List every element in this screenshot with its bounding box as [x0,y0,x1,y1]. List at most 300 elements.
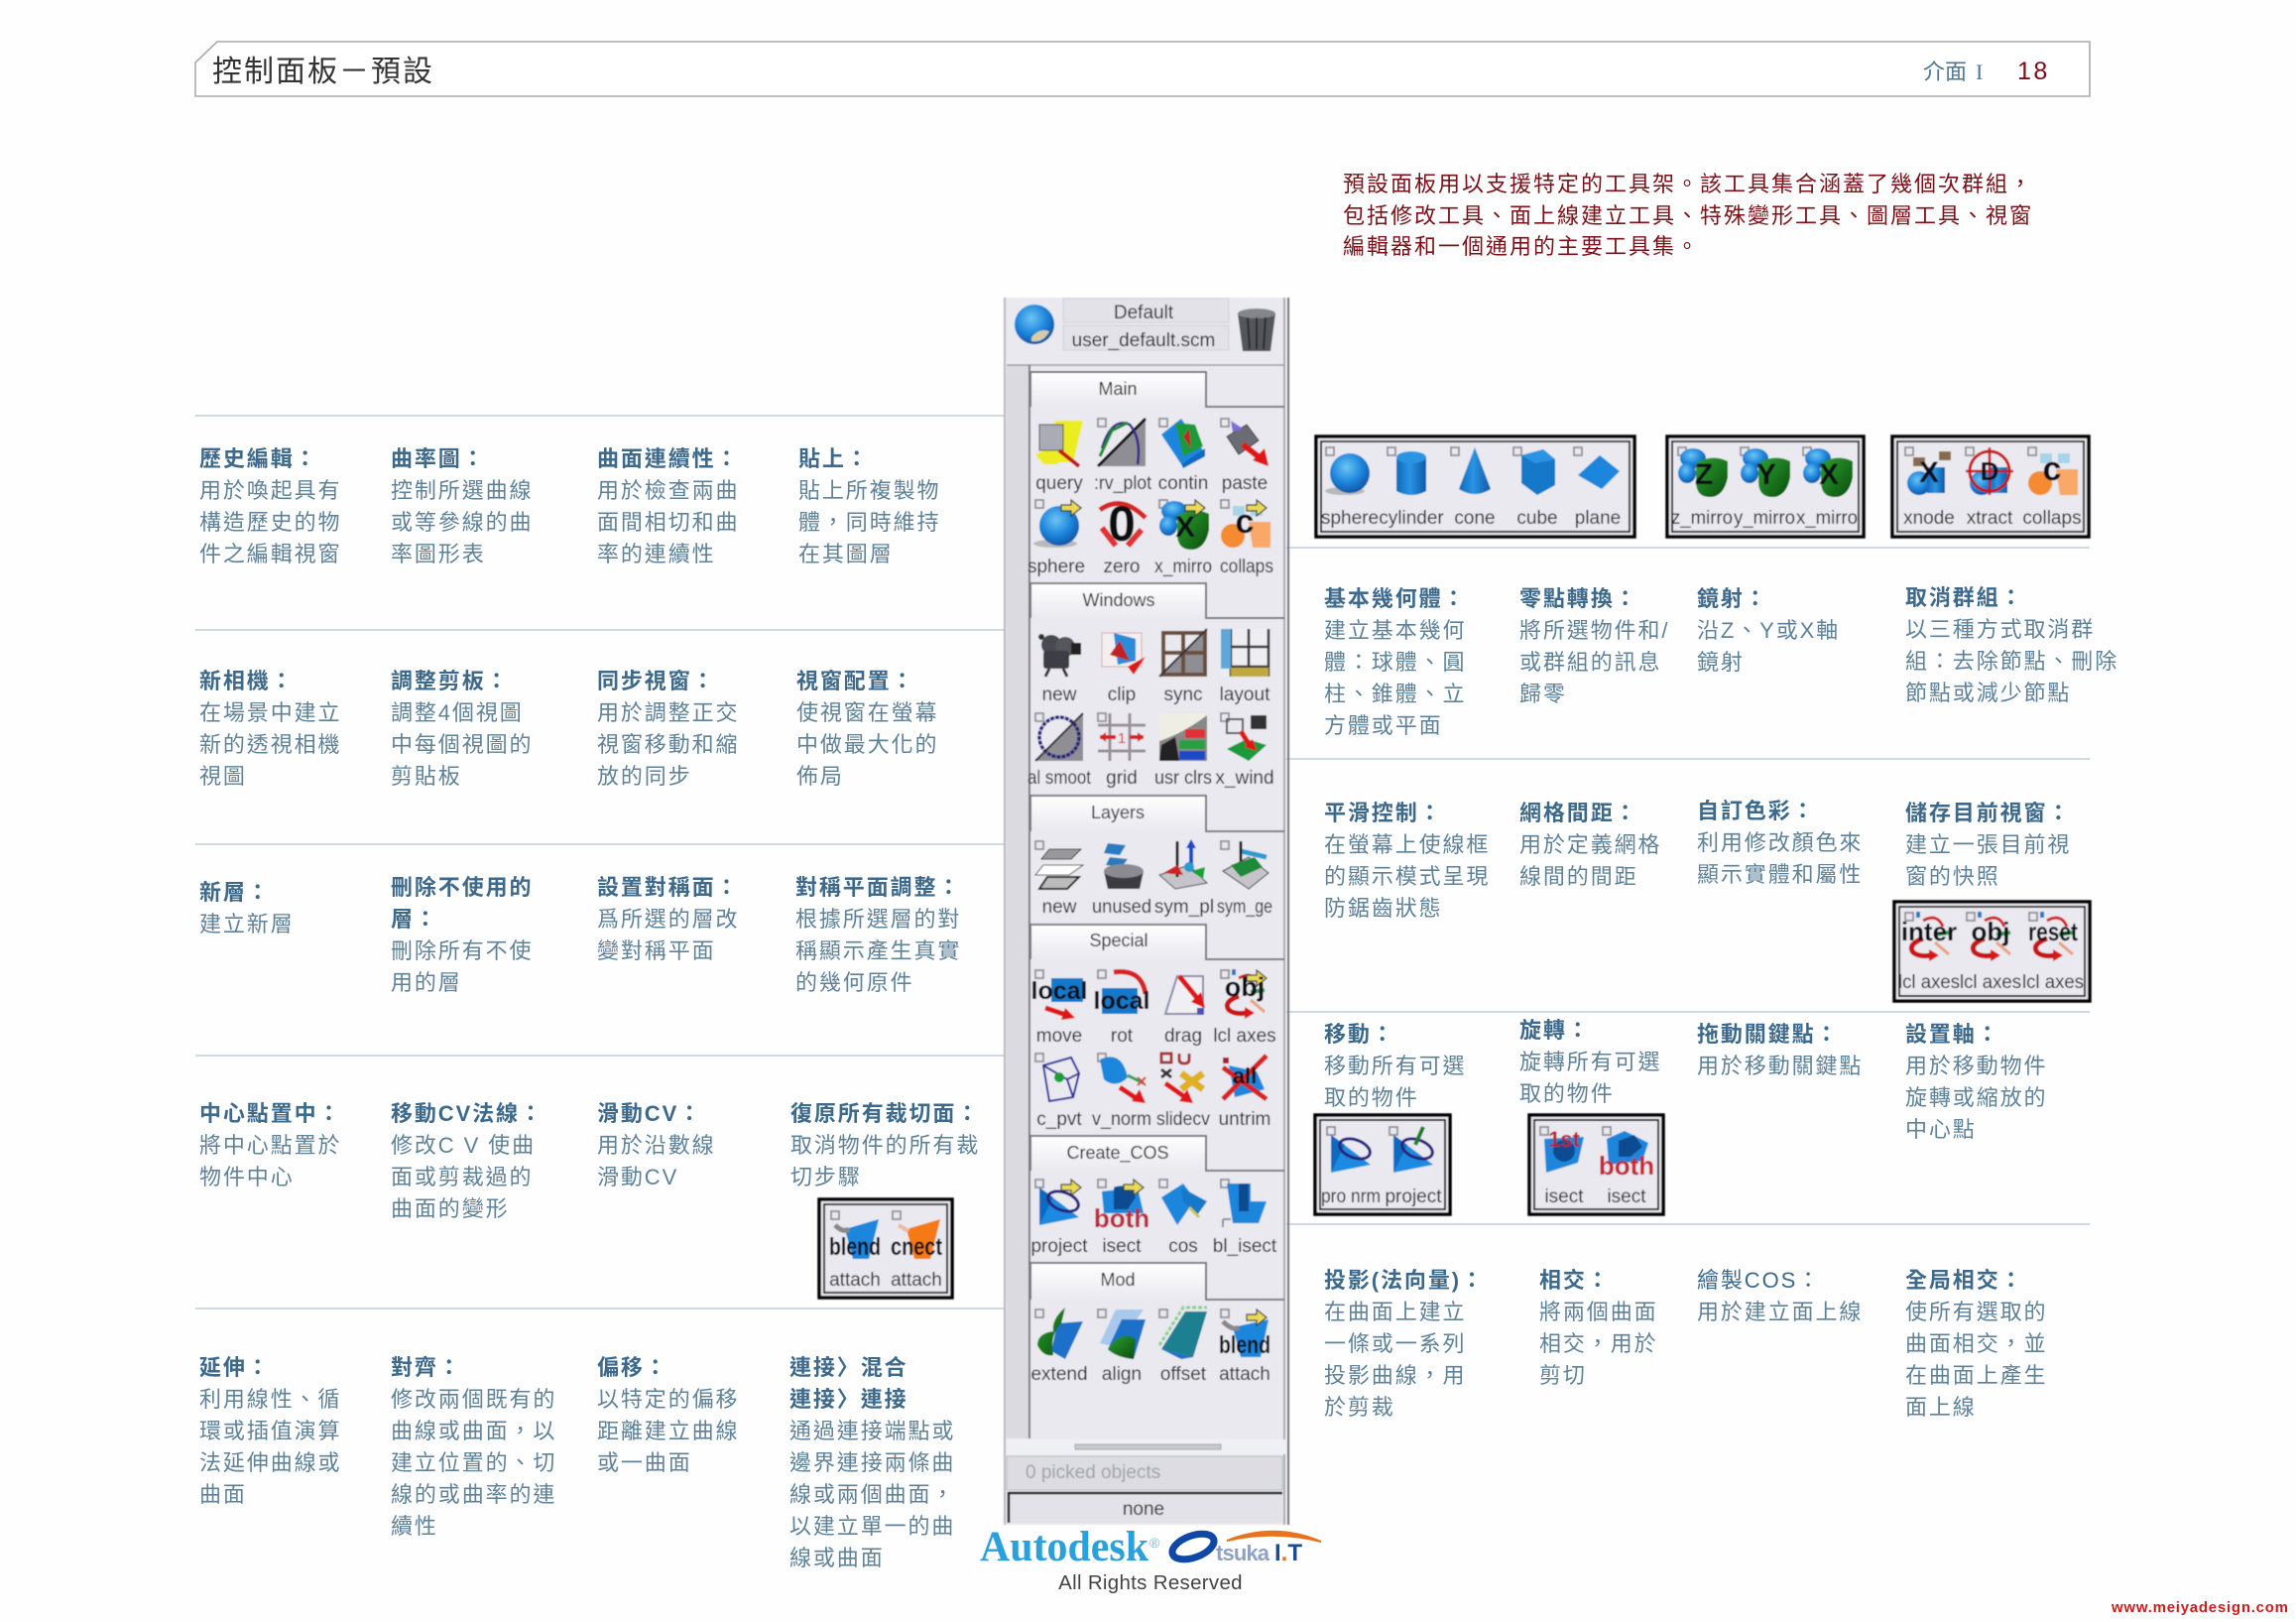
text: 偏移: 或一曲面 [597,1450,692,1474]
text: 全局相交: 全局相交： [1905,1268,2024,1292]
text: 貼上: 貼上： [798,446,870,470]
text: 曲率圖: 率圖形表 [391,542,486,565]
label: cube: cube [1516,508,1558,529]
text: 中心點置中: 物件中心 [199,1165,295,1188]
text: 設置軸: 旋轉或縮放的 [1905,1085,2047,1109]
text: 新層: 新層： [199,879,271,905]
text: 同步視窗: 同步視窗： [597,669,716,692]
toolbox: primitives [1316,437,1634,537]
icon: lcl axes obj: obj [1225,972,1265,1002]
text: 移動CV法線: 修改C V 使曲 [391,1133,536,1157]
text: 連接: 線或兩個曲面， [789,1482,955,1506]
label: sphere: sphere [1321,508,1379,529]
text: 移動CV法線 [391,1101,544,1220]
text: 中心點置中: 中心點置中： [199,1101,341,1125]
text: 取消群組: 取消群組： [1905,585,2024,609]
icon: move local: local [1031,977,1087,1005]
text: 歷史編輯: 構造歷史的物 [199,510,341,534]
control panel [1005,298,1288,1525]
label: isect: isect [1607,1186,1646,1207]
text: 視窗配置: 視窗配置： [796,669,915,692]
tab: Windows [1030,583,1284,618]
icon: query [1035,421,1083,466]
icon: collaps [1221,500,1270,548]
text: 新相機: 新的透視相機 [199,732,341,756]
text: 偏移: 距離建立曲線 [597,1419,739,1442]
text: 設置軸: 中心點 [1905,1117,1977,1141]
text: 調整剪板: 調整剪板： [391,669,510,692]
text: 視窗配置: 使視窗在螢幕 [796,700,938,724]
text: 連接: 通過連接端點或 [789,1419,955,1442]
toolbox: project [1315,1115,1450,1214]
text: 基本幾何體: 體：球體、圓 [1324,649,1466,675]
text: 移動: 取的物件 [1324,1085,1419,1109]
text: 自訂色彩: 利用修改顏色來 [1697,829,1863,855]
icon: xnode [1905,447,1951,495]
text: 延伸: 法延伸曲線或 [199,1450,341,1474]
icon: v_norm [1098,1054,1146,1103]
icon: cylinder [1388,447,1426,495]
text: 視窗配置 [796,669,938,788]
label: cylinder: cylinder [1379,508,1444,529]
text: 旋轉: 取的物件 [1519,1081,1615,1105]
label: xnode: xnode [1903,508,1955,529]
icon: x mirror: X [1819,458,1839,491]
icon: y mirror: Y [1756,458,1776,491]
icon: collaps: c [2043,450,2061,488]
text: 平滑控制: 在螢幕上使線框 [1324,831,1490,857]
label: lcl axes: lcl axes [1213,1026,1276,1047]
logo: Autodesk: Autodesk [980,1524,1148,1570]
icon: attach blend: blend [1219,1331,1270,1359]
text: 取消群組: 節點或減少節點 [1905,681,2071,704]
icon: obj [1967,912,2010,961]
text: 延伸: 延伸： [199,1355,271,1379]
text: 繪製COS: 繪製COS： [1697,1268,1821,1292]
text: 全局相交: 使所有選取的 [1905,1300,2047,1323]
label: x_mirro: x_mirro [1796,508,1858,529]
text: 投影: 投影(法向量)： [1324,1268,1485,1292]
label: z_mirro: z_mirro [1671,508,1733,529]
text: 移動: 移動： [1324,1022,1395,1046]
text: 設置對稱面: 變對稱平面 [597,938,716,962]
text: 拖動關鍵點 [1697,1022,1863,1077]
text: 延伸: 曲面 [199,1482,247,1506]
icon: smooth [1035,713,1083,761]
text: 歷史編輯: 歷史編輯： [199,446,318,470]
label: lcl axes: lcl axes [1898,972,1960,993]
text: 平滑控制: 平滑控制： [1324,800,1443,825]
text: 移動 [1324,1022,1466,1109]
text: 連接 [789,1355,955,1569]
title: 控制面板－預設 [212,56,434,88]
status: 0 picked objects [1007,1456,1282,1490]
label: untrim: untrim [1219,1109,1270,1130]
toolbox: local axes [1894,902,2090,1001]
text: 歷史編輯: 用於喚起具有 [199,478,341,502]
text: 對齊: 曲線或曲面，以 [391,1419,556,1442]
text: 調整剪板 [391,669,533,788]
text: 貼上: 貼上所複製物 [798,478,940,502]
text: 旋轉: 旋轉： [1519,1018,1591,1042]
text: 調整剪板: 中每個視圖的 [391,732,533,756]
text: 設置軸: 用於移動物件 [1905,1054,2047,1077]
tab: Special: Special [1089,931,1148,950]
icon: isect 1st: 1st [1548,1127,1581,1152]
icon: zero [1100,496,1146,552]
text: 移動: 移動所有可選 [1324,1054,1466,1077]
text: 中心點置中: 將中心點置於 [199,1133,341,1157]
text: 偏移 [597,1355,739,1474]
icon: globe [1015,305,1054,344]
tab: Layers: Layers [1091,803,1145,822]
icon: zero: 0 [1108,496,1136,552]
text: 對稱平面調整: 的幾何原件 [795,970,914,994]
text: 對齊: 續性 [391,1514,438,1538]
toolbox: ungroup [1892,437,2089,537]
label: extend: extend [1030,1364,1088,1385]
text: 基本幾何體: 基本幾何體： [1324,585,1466,611]
text: 延伸: 利用線性、循 [199,1387,341,1411]
intro text [1343,172,2033,259]
text: 貼上: 體，同時維持 [798,510,940,534]
label: xtract: xtract [1967,508,2013,529]
icon: z mirror [1678,447,1728,497]
text: 連接: 邊界連接兩條曲 [789,1450,955,1474]
text: 鏡射 [1697,585,1840,675]
icon: c_pvt [1035,1054,1079,1101]
text: 投影: 一條或一系列 [1324,1331,1466,1355]
icon: extend [1035,1308,1083,1359]
text: 曲面連續性: 面間相切和曲 [597,510,739,534]
text: 新相機: 視圖 [199,764,247,788]
logo: Otsuka I.T: I.T [1274,1540,1302,1566]
status: none [1009,1493,1282,1523]
text: 繪製COS: 用於建立面上線 [1697,1300,1863,1323]
label: drag: drag [1164,1026,1202,1047]
text: 同步視窗: 用於調整正交 [597,700,739,724]
tab: Special [1030,925,1284,959]
label: sym_ge: sym_ge [1217,897,1272,918]
text: 移動CV法線: 移動CV法線： [391,1101,544,1125]
text: 對齊: 對齊： [391,1355,462,1379]
icon: blend: blend [829,1233,881,1261]
text: 視窗配置: 中做最大化的 [796,732,938,756]
icon: x_mirro [1159,500,1209,550]
icon: grid: 1 [1118,730,1126,747]
label: usr clrs: usr clrs [1154,768,1212,789]
text: 新相機: 在場景中建立 [199,700,341,724]
text: 網格間距: 網格間距： [1519,800,1638,825]
label: zero: zero [1104,557,1140,577]
label: sphere: sphere [1027,557,1085,577]
label: align: align [1102,1364,1142,1385]
icon: layout [1221,629,1269,677]
text: 復原所有裁切面: 復原所有裁切面： [790,1101,980,1125]
label: grid: grid [1106,768,1138,789]
icon: isect both: both [1094,1203,1149,1233]
text: 儲存目前視窗: 建立一張目前視 [1905,831,2071,857]
logo: Autodesk: ® [1149,1535,1160,1551]
icon: trash [1238,309,1275,351]
text: 滑動CV: 用於沿數線 [597,1133,716,1157]
text: 零點轉換: 將所選物件和/ [1519,617,1669,643]
icon: xnode: X [1919,456,1939,489]
icon: rot local: local [1094,987,1149,1015]
label: crv_plot: :rv_plot [1094,473,1152,494]
label: sym_pl: sym_pl [1154,897,1214,918]
icon: xtract: D [1981,456,1998,486]
scrollbar [1006,1439,1285,1454]
label: x_mirro: x_mirro [1154,557,1212,577]
text: 相交: 相交： [1539,1268,1611,1292]
label: layout: layout [1220,685,1270,705]
text: 復原所有裁切面: 切步驟 [790,1165,862,1188]
text: 基本幾何體: 柱、錐體、立 [1324,681,1466,706]
label: attach: attach [829,1270,881,1291]
tab: Create_COS: Create_COS [1066,1143,1169,1164]
text: 對齊: 建立位置的、切 [391,1450,556,1474]
text: 同步視窗 [597,669,739,788]
text: 零點轉換: 零點轉換： [1519,585,1638,611]
text: 儲存目前視窗 [1905,800,2071,889]
page number: I [1976,60,1983,84]
text: 對稱平面調整: 稱顯示產生真實 [795,938,961,962]
label: new: new [1042,897,1077,918]
text: 連接: 連接〉混合 [789,1355,908,1379]
text: 曲率圖 [391,446,533,565]
tab: Layers [1030,796,1284,831]
text: 連接: 線或曲面 [789,1546,885,1569]
icon: inter: inter [1901,917,1957,946]
label: y_mirro: y_mirro [1734,508,1795,529]
icon: untrim [1223,1056,1267,1099]
text: 對稱平面調整: 對稱平面調整： [795,875,961,899]
icon: crv_plot [1098,419,1146,466]
label: query: query [1035,473,1083,494]
icon: clip [1102,633,1146,675]
text: 取消群組: 以三種方式取消群 [1905,617,2095,641]
label: lcl axes: lcl axes [1960,972,2021,993]
icon: project [1035,1180,1081,1225]
tab: Main [1030,372,1284,407]
text: 繪製COS [1697,1268,1863,1323]
text: 刪除不使用的層 [391,875,533,994]
text: 對齊 [391,1355,556,1538]
text: 基本幾何體 [1324,585,1466,738]
text: 移動CV法線: 面或剪裁過的 [391,1165,533,1188]
text: 同步視窗: 視窗移動和縮 [597,732,739,756]
text: 全局相交: 在曲面上產生 [1905,1363,2047,1387]
text: 儲存目前視窗: 儲存目前視窗： [1905,800,2071,825]
icon: rot local [1094,970,1149,1015]
tab: Create_COS [1030,1136,1284,1171]
text: 新相機 [199,669,341,788]
text: 相交: 將兩個曲面 [1539,1300,1658,1323]
icon: sphere [1033,500,1081,548]
icon: move local [1031,970,1087,1020]
text: 連接: 以建立單一的曲 [789,1514,955,1538]
footer url: www.meiyadesign.com [2112,1599,2289,1616]
panel file: user_default.scm [1063,325,1229,351]
text: 投影: 在曲面上建立 [1324,1300,1466,1323]
panel name: Default [1063,299,1229,323]
label: project: project [1030,1236,1088,1257]
label: al smoot: al smoot [1027,768,1092,789]
icon: grid [1098,713,1146,761]
icon: y mirror [1741,447,1790,497]
text: 滑動CV: 滑動CV： [597,1101,702,1125]
text: 鏡射: 沿Z、Y或X軸 [1697,617,1840,643]
icon: isect both [1094,1180,1149,1233]
label: sync: sync [1163,685,1203,705]
icon: layers new [1035,841,1083,889]
text: 曲面連續性 [597,446,739,565]
label: new: new [1042,685,1077,705]
text: 偏移: 以特定的偏移 [597,1387,739,1411]
label: bl_isect: bl_isect [1213,1236,1277,1257]
label: pro nrm: pro nrm [1321,1186,1381,1207]
text: 自訂色彩 [1697,798,1863,887]
toolbox: mirrors [1667,437,1864,537]
icon: cnect: cnect [891,1233,943,1261]
text: 鏡射: 鏡射 [1697,649,1745,675]
text: 拖動關鍵點: 用於移動關鍵點 [1697,1054,1863,1077]
icon: lcl axes obj [1221,969,1267,1019]
text: 相交 [1539,1268,1658,1387]
label: paste: paste [1222,473,1268,494]
text: 全局相交 [1905,1268,2047,1419]
text: 取消群組: 組：去除節點、刪除 [1905,649,2118,673]
icon: offset [1159,1308,1207,1359]
label: attach: attach [891,1270,942,1291]
text: 同步視窗: 放的同步 [597,764,692,788]
icon: usr clrs [1159,713,1207,761]
text: 新相機: 新相機： [199,669,295,692]
label: lcl axes: lcl axes [2022,972,2084,993]
text: 投影: 投影曲線，用 [1324,1363,1466,1387]
text: 儲存目前視窗: 窗的快照 [1905,863,2000,889]
text: 鏡射: 鏡射： [1697,585,1768,611]
label: contin: contin [1158,473,1208,494]
icon: new camera [1038,634,1081,677]
icon: sym_ge [1221,841,1269,889]
icon: obj: obj [1972,917,2009,946]
copyright: All Rights Reserved [1058,1571,1243,1594]
page number: 介面 [1923,60,1967,84]
label: x_wind: x_wind [1215,768,1274,789]
text: 基本幾何體: 建立基本幾何 [1324,617,1466,643]
text: 曲面連續性: 率的連續性 [597,542,716,565]
text: 對齊: 線的或曲率的連 [391,1482,556,1506]
text: 零點轉換: 或群組的訊息 [1519,649,1661,675]
text: 偏移: 偏移： [597,1355,668,1379]
text: 刪除不使用的層: 層： [391,907,438,931]
panel file: user_default.scm: user_default.scm [1072,330,1215,351]
text: 設置對稱面 [597,875,739,962]
icon: slidecv [1161,1054,1203,1103]
icon: cone [1451,447,1491,494]
intro text: 包括修改工具、面上線建立工具、特殊變形工具、圖層工具、視窗 [1343,203,2033,228]
text: 復原所有裁切面: 取消物件的所有裁 [790,1133,980,1157]
icon: drag [1165,976,1205,1015]
tab: Windows: Windows [1082,590,1155,610]
text: 中心點置中 [199,1101,341,1188]
label: cone: cone [1454,508,1496,529]
intro text: 預設面板用以支援特定的工具架。該工具集合涵蓋了幾個次群組， [1343,172,2033,196]
icon: sphere [1325,447,1370,495]
icon: isect both: both [1599,1151,1654,1181]
text: 零點轉換: 歸零 [1519,681,1567,706]
label: clip: clip [1108,685,1136,705]
icon: sync [1159,629,1207,677]
text: 曲率圖: 曲率圖： [391,446,486,470]
icon: x mirror [1803,447,1853,497]
text: 調整剪板: 調整4個視圖 [391,700,524,724]
status: none: none [1123,1499,1164,1520]
label: v_norm: v_norm [1092,1109,1151,1130]
tab: Mod: Mod [1100,1270,1136,1290]
icon: z mirror: Z [1695,458,1713,491]
text: 全局相交: 面上線 [1905,1395,1977,1419]
label: slidecv: slidecv [1156,1109,1210,1130]
text: 設置對稱面: 設置對稱面： [597,875,739,899]
text: 曲面連續性: 曲面連續性： [597,446,739,470]
tab: Mod [1030,1263,1284,1300]
text: 網格間距: 線間的間距 [1519,863,1638,889]
text: 曲率圖: 或等參線的曲 [391,510,533,534]
icon: paste [1221,419,1269,466]
icon: reset [2028,912,2078,961]
text: 歷史編輯: 件之編輯視窗 [199,542,341,565]
intro text: 編輯器和一個通用的主要工具集。 [1343,234,1700,259]
text: 設置軸 [1905,1022,2047,1141]
label: plane: plane [1575,508,1621,529]
icon: align [1098,1310,1146,1359]
text: 取消群組 [1905,585,2118,704]
text: 零點轉換 [1519,585,1669,706]
icon: pro nrm [1327,1127,1373,1173]
icon: collaps: c [1236,503,1254,541]
label: project: project [1385,1186,1442,1207]
label: offset: offset [1160,1364,1207,1385]
text: 平滑控制: 防鋸齒狀態 [1324,895,1443,921]
text: 網格間距 [1519,800,1661,889]
text: 新層 [199,879,295,936]
text: 貼上 [798,446,940,565]
icon: x_mirro: X [1175,511,1195,544]
text: 對稱平面調整: 根據所選層的對 [795,907,961,931]
text: 基本幾何體: 方體或平面 [1324,712,1443,738]
text: 新層: 建立新層 [199,911,295,936]
status: 0 picked objects: 0 picked objects [1026,1462,1160,1483]
page number [1923,58,2050,85]
icon: reset: reset [2028,917,2078,946]
label: isect: isect [1102,1236,1142,1257]
logo: Otsuka I.T: tsuka [1216,1541,1270,1565]
icon: cube [1513,447,1555,495]
text: 刪除不使用的層: 刪除所有不使 [391,938,533,962]
icon: xtract [1966,447,2013,495]
label: isect: isect [1544,1186,1584,1207]
page number: 18 [2017,58,2050,85]
text: 貼上: 在其圖層 [798,542,894,565]
header bar [194,41,2091,97]
toolbox: attach [819,1199,952,1298]
label: rot: rot [1111,1026,1134,1047]
text: 延伸 [199,1355,341,1506]
text: 復原所有裁切面 [790,1101,980,1188]
